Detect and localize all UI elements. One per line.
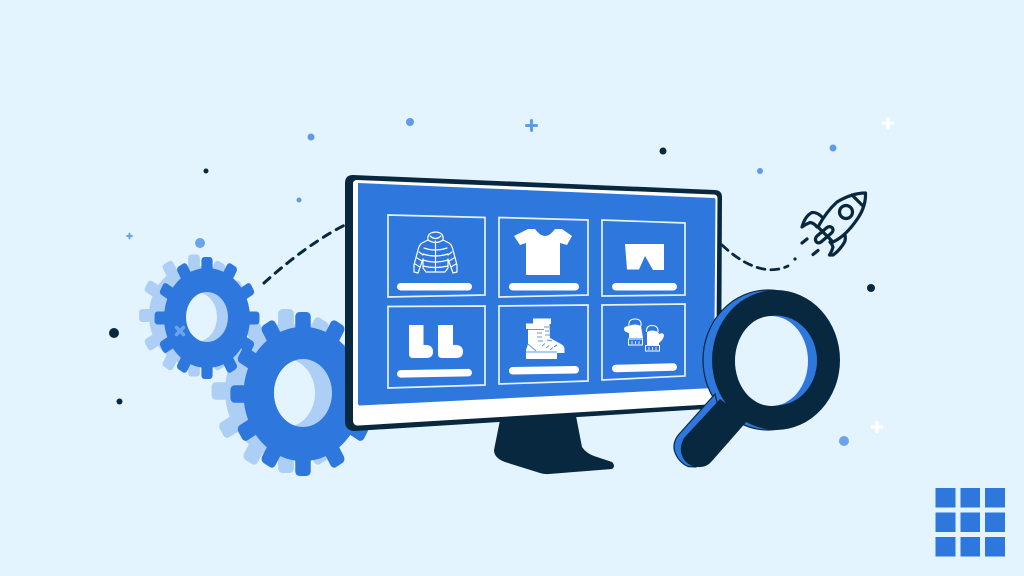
label bar — [397, 369, 472, 378]
product card: mittens — [602, 304, 685, 380]
illustration canvas — [109, 116, 1005, 556]
product card: socks — [388, 306, 485, 388]
magnifying glass — [674, 290, 840, 467]
small gear shadow — [139, 254, 249, 376]
product card: t-shirt — [499, 218, 588, 297]
icon: boots — [526, 318, 564, 359]
icon: socks — [409, 325, 463, 358]
label bar — [612, 283, 677, 290]
magnifier back layer — [674, 290, 833, 467]
icon: puffer jacket — [414, 232, 457, 273]
magnifier lens rim — [735, 316, 817, 406]
magnifier lens — [735, 316, 808, 406]
icon: x sparkle on small gear — [176, 328, 184, 334]
product card: jacket — [388, 215, 485, 297]
logo: grid — [936, 488, 1005, 556]
small gear hole — [186, 292, 228, 342]
small gear — [155, 257, 259, 379]
icon: mittens — [624, 319, 664, 351]
gears — [139, 254, 376, 476]
monitor screen — [358, 183, 716, 406]
product card: boots — [499, 305, 588, 384]
decorative dots and sparkles — [109, 118, 892, 446]
label bar — [509, 283, 579, 290]
dashed path: gears to monitor — [264, 225, 345, 283]
monitor stand — [494, 416, 614, 474]
icon: t-shirt — [514, 229, 572, 275]
big gear hole — [274, 359, 332, 427]
label bar — [397, 283, 472, 290]
monitor frame — [345, 175, 722, 431]
label bar — [612, 363, 677, 372]
big gear — [230, 312, 376, 476]
monitor bezel — [353, 180, 718, 426]
magnifier ring and handle — [681, 290, 840, 467]
icon: shorts — [625, 244, 664, 270]
label bar — [509, 366, 579, 375]
monitor — [345, 175, 722, 431]
dashed path: monitor to rocket — [722, 245, 788, 270]
big gear shadow — [212, 309, 360, 473]
product card: shorts — [602, 220, 685, 296]
icon: rocket — [795, 193, 866, 259]
